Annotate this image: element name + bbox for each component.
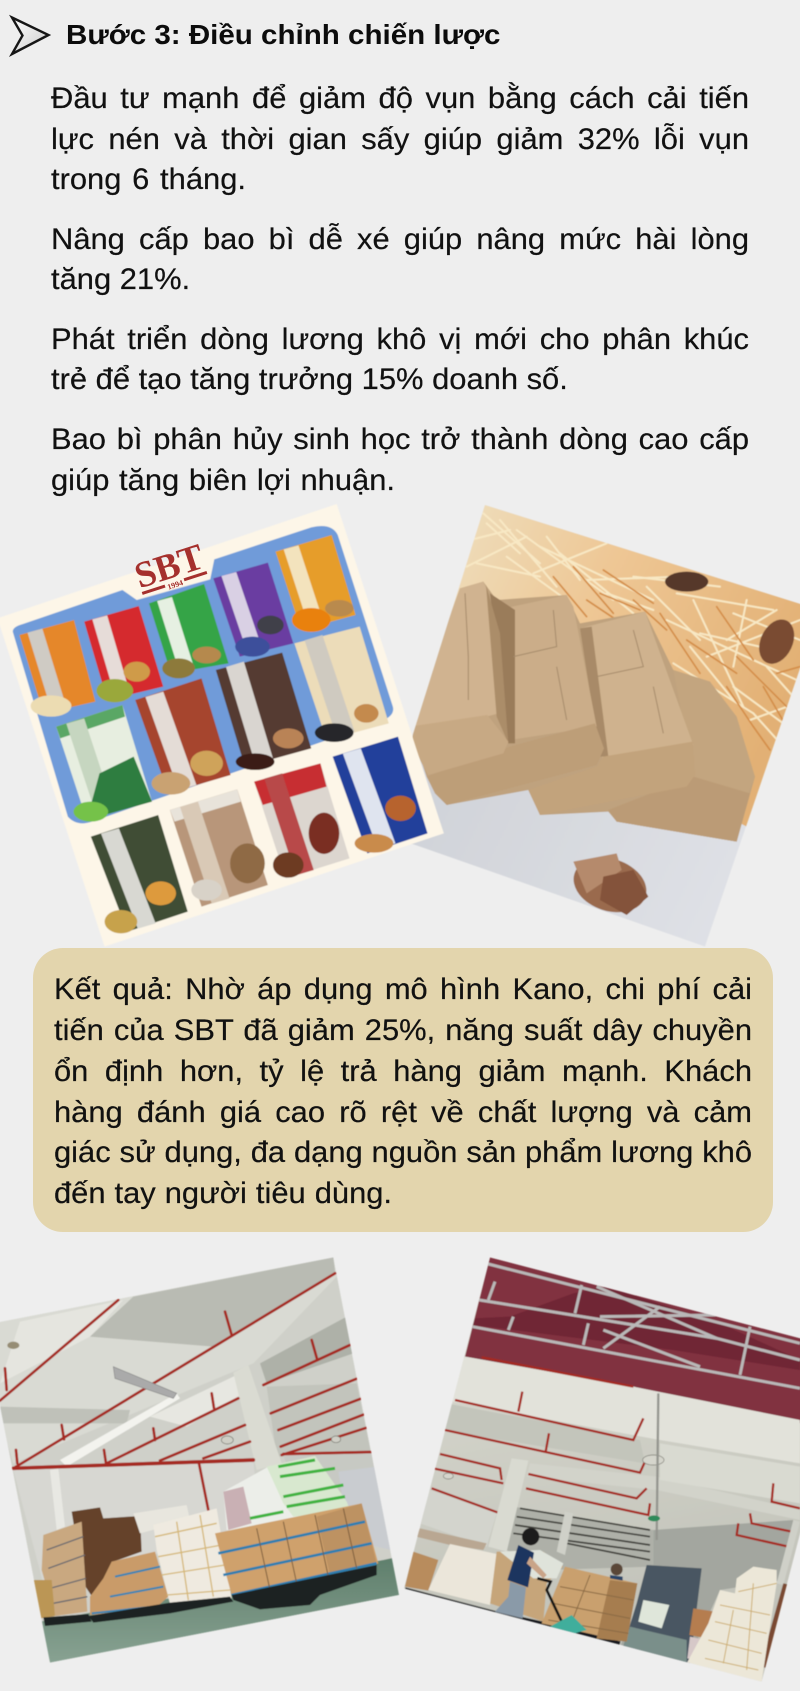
callout: result: tiến của SBT đã giảm 25%, năng suất dây chuyền [54,1014,752,1047]
ceiling bands [443,1357,800,1463]
dark brown cartons [72,1507,142,1596]
red pipes [432,1357,800,1547]
pallets [43,1565,377,1626]
bar B [512,596,597,738]
callout: result: ổn định hơn, tỷ lệ trả hàng giảm mạnh. Khách [54,1055,752,1088]
photo: SBT product range [0,504,444,947]
white cartons [153,1508,232,1604]
text block: biodegradable packaging [51,423,749,497]
white load [638,1600,669,1628]
ceiling beams [0,1257,337,1463]
back wall with dark bars [507,1507,653,1570]
column [233,1365,282,1470]
white cartons right [687,1567,777,1682]
white sacks [339,1468,376,1492]
bag: sesame [294,627,389,742]
green and white cartons [223,1456,350,1533]
lamps [221,1436,341,1444]
red pipes [0,1273,372,1510]
logo: SBT: SBT [130,536,209,597]
bag: red fruit [84,606,163,702]
tan cartons [42,1522,87,1616]
worker [495,1528,587,1635]
bag: orange [19,620,95,717]
columns [488,1458,528,1552]
photo: compressed ration bars on straw [382,505,800,947]
callout: result: Kết quả: Nhờ áp dụng mô hình Kano, chi phí cải [54,973,752,1006]
title: Bước 3: Điều chỉnh chiến lược [66,19,500,50]
bag: blueberry [213,563,293,657]
cartons mid [90,1552,168,1615]
pinecone front [573,853,649,916]
text block: new product line: trẻ để tạo tăng trưởng 15% doanh số. [51,363,568,396]
roof [465,1257,800,1430]
text block: new product line: Phát triển dòng lương khô vị mới cho phân khúc [51,323,749,356]
text block: biodegradable packaging: Bao bì phân hủy sinh học trở thành dòng cao cấp [51,423,749,456]
icon: arrow [12,18,48,54]
photo: warehouse with worker and pallet truck [404,1257,800,1682]
text block: investment [51,82,749,196]
pinecone right [758,619,795,664]
dark bay [623,1565,702,1663]
callout: result: hàng đánh giá cao rõ rệt về chất lượng và cảm [54,1096,752,1129]
white cartons left [428,1544,497,1605]
left cartons [405,1552,438,1591]
bag: red diet [254,763,349,878]
lamps [443,1455,664,1479]
bag: beige [170,789,268,907]
photo: warehouse with stacked cartons [0,1257,399,1663]
bars base [410,582,755,842]
bag: mango [276,535,356,632]
text block: investment: lực nén và thời gian sấy giúp giảm 32% lỗi vụn [51,123,749,156]
bag: almond [333,737,428,853]
bar C [588,612,692,756]
pinecone back [665,572,708,592]
bar D [711,683,754,774]
cartons right [215,1503,378,1595]
bag: matcha [56,705,152,822]
bag: dark green [91,815,188,933]
text block: packaging: tăng 21%. [51,263,190,296]
text block: biodegradable packaging: giúp tăng biên lợi nhuận. [51,464,395,497]
text block: packaging [51,223,749,296]
bag: chocolate [216,653,311,770]
callout: result: giác sử dụng, đa dạng nguồn sản phẩm lương khô [54,1136,752,1169]
logo: SBT: 1994 [166,578,184,592]
text block: new product line [51,323,749,396]
bag: kiwi [149,584,229,678]
text block: investment: trong 6 tháng. [51,163,246,196]
callout: result: đến tay người tiêu dùng. [54,1177,392,1210]
cartons centre [542,1567,637,1642]
blue panel [13,526,393,823]
callout: result [33,948,773,1232]
text block: investment: Đầu tư mạnh để giảm độ vụn bằng cách cải tiến [51,82,749,115]
wall [14,1462,254,1574]
pallet shadow [405,1589,620,1643]
bar A [416,582,496,726]
bag: walnut [135,678,231,795]
floor [40,1557,399,1663]
second worker [610,1563,623,1581]
brown cartons right [689,1608,715,1638]
text block: packaging: Nâng cấp bao bì dễ xé giúp nâng mức hài lòng [51,223,749,256]
